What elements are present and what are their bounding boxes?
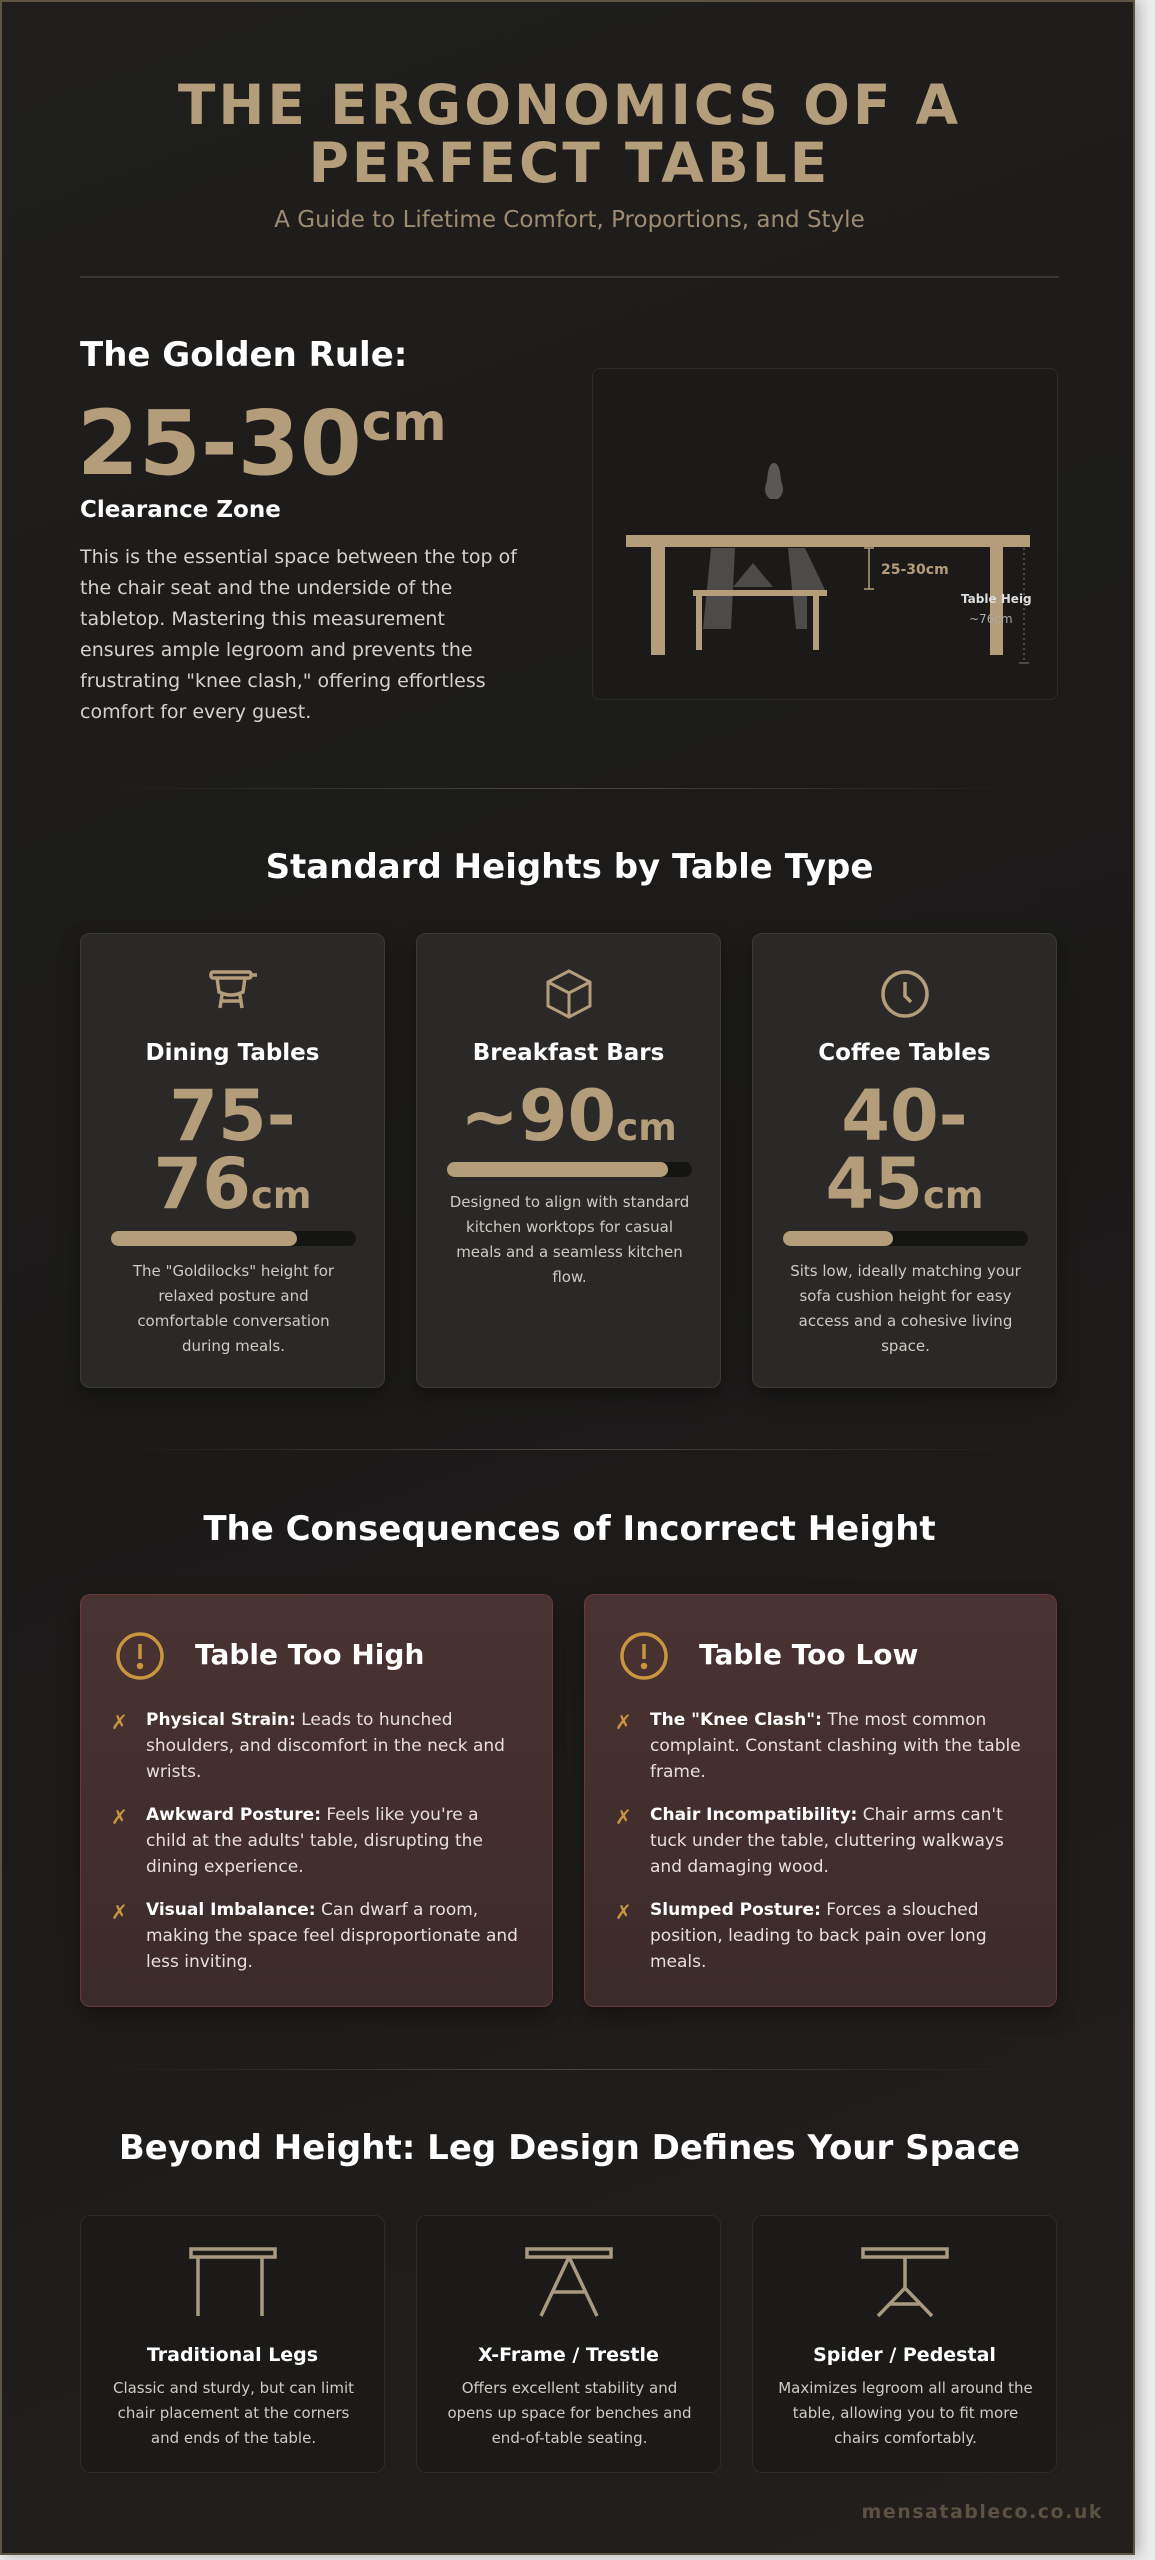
- heading: leg design: Beyond Height: Leg Design Defines Your Space: [119, 2128, 1020, 2168]
- panel: table too low: [584, 1594, 1057, 2007]
- card: breakfast bars: Breakfast Bars: [473, 1040, 664, 1066]
- card: spider pedestal: Spider / Pedestal: [813, 2344, 996, 2366]
- progress bar: [783, 1231, 1028, 1246]
- big number 25-30cm: 25-30cm: [77, 391, 447, 495]
- icon: clock: [881, 970, 929, 1018]
- tabletop: [626, 535, 1030, 547]
- panel: table too low: ✗: [615, 1900, 632, 1924]
- progress bar: [447, 1162, 692, 1177]
- icon: traditional legs: [189, 2247, 277, 2316]
- card: dining tables: Dining Tables: [146, 1040, 319, 1066]
- header: too high: [116, 1632, 424, 1680]
- card: x-frame: X-Frame / Trestle: [478, 2344, 659, 2366]
- panel: table too low: ✗: [615, 1805, 632, 1829]
- pendant: [765, 463, 783, 499]
- list: high issues: ✗: [111, 1710, 128, 1734]
- panel: table too high: ✗: [111, 1900, 128, 1924]
- person silhouette: [703, 548, 827, 629]
- icon: cube: [546, 969, 592, 1019]
- number 75-76cm: 76cm: [154, 1143, 311, 1225]
- card: coffee tables: [752, 933, 1057, 1388]
- number 75-76cm: 75-: [169, 1075, 296, 1157]
- list: low issues: The "Knee Clash": The most common complaint. Constant clashing with the table frame.: [650, 1710, 1021, 1782]
- card: traditional legs: Traditional Legs: [147, 2344, 318, 2366]
- header: too high: Table Too High: [195, 1638, 424, 1671]
- header: too low: [620, 1632, 918, 1680]
- card: breakfast bars: Designed to align with standard kitchen worktops for casual meals and a seamless kitchen flow.: [450, 1193, 689, 1286]
- number 75-76cm: [154, 1075, 311, 1225]
- subheading clearance zone: Clearance Zone: [80, 497, 281, 523]
- panel: table too low: Chair Incompatibility: Chair arms can't tuck under the table, cluttering walkways and damaging wood.: [650, 1805, 1004, 1877]
- title: THE ERGONOMICS OF A: [178, 73, 961, 137]
- diagram: table clearance: ~76cm: [969, 612, 1013, 626]
- diagram: table clearance: 25-30cm: [881, 562, 949, 578]
- header: too low: Table Too Low: [699, 1638, 918, 1671]
- icon: x-frame: [525, 2247, 613, 2317]
- card: x-frame: [416, 2215, 721, 2473]
- description paragraph: This is the essential space between the top of the chair seat and the underside of the tabletop. Mastering this measurement ensures ample legroom and prevents the frustrating "knee clash," offering effortless comfort for every guest.: [80, 546, 517, 723]
- panel: table too high: Awkward Posture: Feels like you're a child at the adults' table, disrupting the dining experience.: [146, 1805, 483, 1877]
- card: traditional legs: Classic and sturdy, but can limit chair placement at the corners and ends of the table.: [113, 2379, 354, 2447]
- title: [178, 73, 961, 195]
- card: spider pedestal: Maximizes legroom all around the table, allowing you to fit more chairs comfortably.: [778, 2379, 1033, 2447]
- chair: [693, 590, 827, 596]
- number 40-45cm: 45cm: [826, 1143, 983, 1225]
- diagram: table clearance: [592, 368, 1058, 700]
- footer: website: mensatableco.co.uk: [862, 2501, 1103, 2523]
- number 40-45cm: [826, 1075, 983, 1225]
- number ~90cm: ~90cm: [460, 1075, 677, 1157]
- panel: table too low: Slumped Posture: Forces a slouched position, leading to back pain over long meals.: [650, 1900, 987, 1972]
- card: coffee tables: Coffee Tables: [818, 1040, 991, 1066]
- diagram: table clearance: Table Heig: [961, 592, 1032, 606]
- panel: table too high: ✗: [111, 1805, 128, 1829]
- golden rule text block: [77, 335, 518, 723]
- card: traditional legs: [80, 2215, 385, 2473]
- measurement: [864, 548, 874, 589]
- heading: consequences: The Consequences of Incorrect Height: [203, 1509, 936, 1549]
- number 40-45cm: 40-: [841, 1075, 968, 1157]
- heading: golden rule: The Golden Rule:: [80, 335, 407, 375]
- panel: table too high: [80, 1594, 553, 2007]
- panel: table too high: Visual Imbalance: Can dwarf a room, making the space feel disproportionate and less inviting.: [146, 1900, 518, 1972]
- card: spider pedestal: [752, 2215, 1057, 2473]
- icon: pedestal: [861, 2247, 949, 2318]
- list: low issues: ✗: [615, 1710, 632, 1734]
- progress bar: [111, 1231, 356, 1246]
- card: dining tables: [80, 933, 385, 1388]
- card: x-frame: Offers excellent stability and opens up space for benches and end-of-table seating.: [447, 2379, 692, 2447]
- subtitle: A Guide to Lifetime Comfort, Proportions, and Style: [274, 207, 865, 233]
- card: breakfast bars: [416, 933, 721, 1388]
- title: PERFECT TABLE: [309, 131, 830, 195]
- card: coffee tables: Sits low, ideally matching your sofa cushion height for easy access and a cohesive living space.: [790, 1262, 1021, 1355]
- list: high issues: Physical Strain: Leads to hunched shoulders, and discomfort in the neck and wrists.: [146, 1710, 505, 1782]
- heading: standard heights: Standard Heights by Table Type: [266, 847, 873, 887]
- card: dining tables: The "Goldilocks" height for relaxed posture and comfortable conversation during meals.: [133, 1262, 334, 1355]
- icon: dining: [209, 970, 257, 1008]
